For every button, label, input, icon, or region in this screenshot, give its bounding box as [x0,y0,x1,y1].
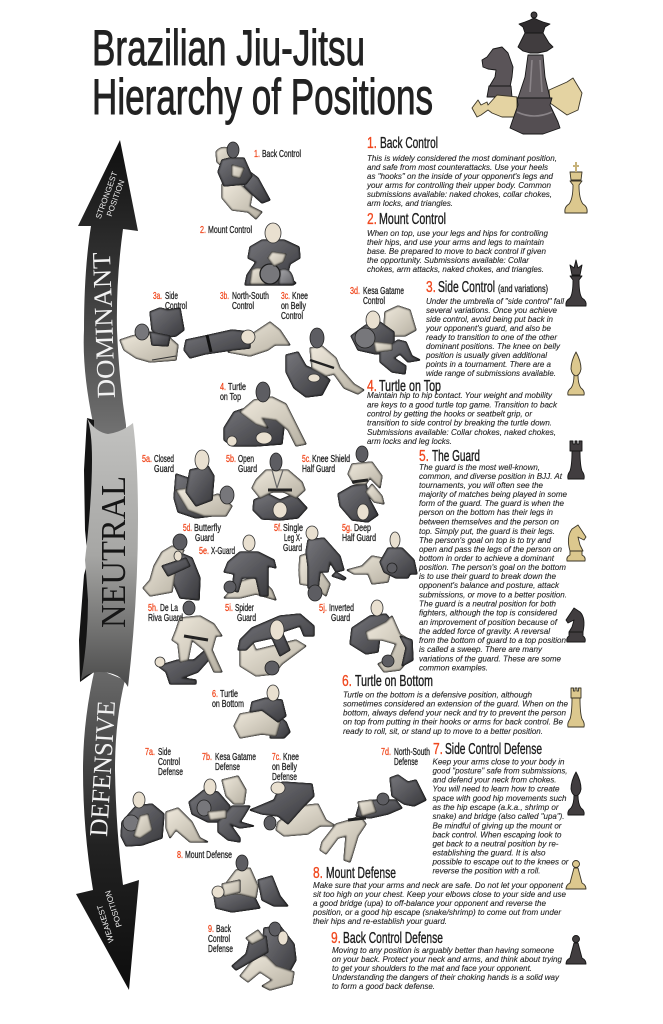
section 1: back control: arm locks, and triangles. [367,198,453,208]
section 7: side control defense: good "posture" safe from submissions, [432,766,568,776]
section 9: back control defense: to get your shoulders to the mat and face your opponent. [332,963,532,973]
section 4: turtle on top: Turtle on Top [379,378,441,395]
section 3: side control and variations: Side Control [438,279,495,296]
figure labels: Kesa Gatame [215,751,256,763]
figure labels: Closed [154,453,174,465]
section 1: back control: submissions available: naked chokes, collar chokes, [367,189,552,199]
figure labels: Open [238,453,254,465]
figure: 9 back control defense [232,922,296,990]
section 5: the guard: an improvement of position because of [419,617,558,627]
icon: white rook [568,688,584,727]
icon: white king [565,162,587,213]
figure: 3c knee on belly control [286,328,364,397]
section 3: side control and variations: position is usually given additional [425,350,548,360]
section 4: turtle on top: 4. [367,378,377,395]
section 7: side control defense: get back to a neutral position by re- [432,838,559,848]
section 8: mount defense: sit too high on your chest. Keep your elbows close to your side and use [313,889,566,899]
figure labels: Leg X- [284,532,302,544]
figure labels: Control [232,300,254,312]
figure labels: North-South [394,746,430,758]
section 5: the guard: variations of the guard. These are some [419,654,561,664]
title [92,20,433,125]
figure labels: on Belly [272,761,297,773]
figure labels: Side [158,746,171,758]
section 6: turtle on bottom: on top from putting in their hooks or arms for back control. Be [343,716,563,726]
section 8: mount defense: a good bridge (upa) to off-balance your opponent and reverse the [313,898,546,908]
figure labels: 9. [208,923,214,935]
icon: chess pieces, black king over fallen white king with black knight [472,12,582,134]
figure labels: 5a. [142,453,152,465]
section 8: mount defense [312,865,566,926]
figure: 5a closed guard [174,450,234,518]
icon: black queen [566,260,586,306]
figure: 5j inverted guard [350,600,413,672]
arrow: dominant to defensive scale [76,140,139,990]
icon: black bishop [568,772,584,815]
figure labels: Guard [195,532,214,544]
section 4: turtle on top [367,378,558,446]
figure labels: 7d. [381,746,391,758]
section 8: mount defense: 8. [313,865,323,882]
figure: 5e x-guard [224,535,276,600]
section 2: mount control: their hips, and use your arms and legs to maintain [367,237,544,247]
figure: 7b kesa gatame defense [189,776,254,842]
figure labels: 5c. [302,453,311,465]
figure labels: 8. [177,849,183,861]
title: Hierarchy of Positions [92,69,433,125]
figure labels: Control [165,300,187,312]
figure: 3d kesa gatame control [351,306,420,374]
figure: 5b open guard [252,453,307,520]
figure labels: Butterfly [194,522,222,534]
figure labels: Mount Defense [185,849,232,861]
figure labels: 1. [254,148,260,160]
figure labels: Defense [394,756,418,768]
figure labels: 6. [212,688,218,700]
figure labels: Inverted [329,602,354,614]
icon: white knight [567,525,586,561]
section 6: turtle on bottom: Turtle on the bottom is a defensive position, although [343,690,532,700]
section 7: side control defense: You will need to learn how to create [432,784,560,794]
section 5: the guard: 5. [419,448,429,465]
figure labels: Knee Shield [312,453,350,465]
figure labels: 5h. [148,602,158,614]
section 5: the guard: from the bottom of guard to a top position [419,635,566,645]
arrow label: weakest position: WEAKEST [95,904,116,944]
figure labels: Defense [272,771,297,783]
section 3: side control and variations: your opponent's guard, and also be [425,323,551,333]
figure: 5g deep half guard [347,532,417,584]
figure labels: Guard [237,612,256,624]
section 9: back control defense [331,930,562,991]
section 5: the guard: open and pass the legs of the person on [419,544,562,554]
figure labels [142,148,430,955]
section 8: mount defense: Mount Defense [326,865,396,882]
figure: 3b north-south control [184,322,290,358]
section 1: back control: as "hooks" on the inside of your opponent's legs and [367,171,554,181]
figure labels: 3a. [153,290,162,302]
figure labels: on Belly [281,300,306,312]
section 5: the guard: opponent's balance and posture, attack [419,580,560,590]
arrow label: strongest position: STRONGEST [94,170,119,220]
figure labels: Back Control [262,148,301,160]
figure labels: Guard [331,612,350,624]
figure labels: 7a. [145,746,155,758]
section 5: the guard: is called a sweep. There are many [419,644,543,654]
figure: 3a side control [120,308,184,362]
section 4: turtle on top: Maintain hip to hip contact. Your weight and mobility [367,390,553,400]
section 3: side control and variations: dominant positions. The knee on belly [426,341,561,351]
section 3: side control and variations: several variations. Once you achieve [426,305,557,315]
section 7: side control defense: snake) and bridge (also called "upa"). [432,811,564,821]
figure labels: 5j. [319,602,327,614]
section 9: back control defense: on your back. Protect your neck and arms, and think about trying [332,954,562,964]
section 9: back control defense: 9. [331,930,341,947]
figure: 5d butterfly guard [143,534,200,600]
figure labels: 5i. [225,602,233,614]
figure labels: Knee [283,751,299,763]
section 1: back control: and safe from most counterattacks. Use your heels [367,162,549,172]
section 8: mount defense: Make sure that your arms and neck are safe. Do not let your opponent [313,880,564,890]
figure labels: Defense [208,943,233,955]
section 8: mount defense: their hips and re-establish your guard. [313,916,447,926]
figure: 7c knee on belly defense [250,782,336,836]
figure labels: Riva Guard [148,612,183,624]
figure: 5c knee shield half guard [338,446,384,522]
figure labels: Back [216,923,231,935]
section 7: side control defense [432,741,570,876]
section 5: the guard: bottom in order to achieve a dominant [419,553,555,563]
section 2: mount control: When on top, use your legs and hips for controlling [367,228,548,238]
figure labels: Control [208,933,230,945]
section 9: back control defense: Moving to any position is arguably better than having someone [332,945,554,955]
section 4: turtle on top: Submissions available: Collar chokes, naked chokes, [367,427,556,437]
figure labels: Half Guard [342,532,376,544]
section 6: turtle on bottom [342,673,568,736]
section 1: back control [366,135,557,208]
figure labels: Kesa Gatame [363,285,404,297]
section 2: mount control: chokes, arm attacks, naked chokes, and triangles. [367,264,544,274]
section 5: the guard: position. The person's goal on the bottom [418,562,566,572]
section 1: back control: This is widely considered the most dominant position, [367,153,557,163]
section 5: the guard: majority of matches being played in some [419,489,567,499]
section 3: side control and variations: ready to transition to one of the other [426,332,558,342]
figure labels: Defense [215,761,240,773]
section 7: side control defense: Side Control Defense [445,741,542,758]
figure labels: Control [363,295,385,307]
section 2: mount control: base. Be prepared to move to back control if given [367,246,546,256]
section 7: side control defense: space with good hip movements such [432,793,567,803]
arrow label: weakest position [95,889,124,944]
section 6: turtle on bottom: 6. [342,673,352,690]
figure labels: 5d. [183,522,192,534]
figure labels: 7b. [202,751,212,763]
figure: 5h de la riva guard [155,601,222,684]
section 1: back control: your arms for controlling their upper body. Common [366,180,551,190]
section 5: the guard: is to use their guard to break down the [419,571,556,581]
section 7: side control defense: and defend your neck from chokes. [432,774,556,784]
figure: 8 mount defense [212,855,288,912]
section 3: side control and variations: 3. [426,279,436,296]
figure labels: on Bottom [212,698,244,710]
figure labels: Control [158,756,180,768]
figure labels: Spider [235,602,254,614]
section 3: side control and variations: side control, avoid being put back in [426,314,553,324]
figure labels: on Top [220,391,241,403]
section 4: turtle on top: control by getting the hooks or seatbelt grip, or [367,408,533,418]
section 1: back control: Back Control [380,135,438,152]
section 7: side control defense: back control. When escaping look to [432,830,562,840]
arrow label: defensive: DEFENSIVE [84,700,121,837]
section 2: mount control: the opportunity. Submissions available: Collar [367,255,530,265]
arrow label: strongest position: POSITION [105,178,126,218]
section 5: the guard: tournaments, you will often see the [419,480,543,490]
section 7: side control defense: 7. [433,741,443,758]
section 5: the guard: The person's goal on top is to try and [419,535,552,545]
section 5: the guard: between themselves and the person on [419,516,559,526]
section 9: back control defense: to form a good back defense. [332,981,435,991]
figure labels: Turtle [220,688,238,700]
figure labels: 3c. [281,290,290,302]
section 3: side control and variations: points in a tournament. There are a [425,359,551,369]
section 5: the guard: the added force of gravity. A reversal [419,626,551,636]
figure labels: 3b. [220,290,229,302]
section 4: turtle on top: arm locks and leg locks. [367,436,452,446]
figure labels: 7c. [272,751,281,763]
section 9: back control defense: Understanding the dangers of their choking hands is a solid way [332,972,560,982]
figure labels: 2. [200,224,206,236]
figure labels: 4. [220,381,226,393]
section 5: the guard: submissions, or move to a better position. [419,590,567,600]
section 5: the guard: form of the guard. The guard is when the [419,498,564,508]
section 5: the guard: person on the bottom has their legs in [418,507,553,517]
section 5: the guard: common, and diverse position in BJJ. At [419,471,563,481]
section 5: the guard: The Guard [432,448,480,465]
title: Brazilian Jiu-Jitsu [92,20,365,76]
icon: white bishop [568,352,584,395]
section 9: back control defense: Back Control Defense [343,930,443,947]
figure labels: Side [165,290,178,302]
figure labels: Guard [154,463,174,475]
section 1: back control: 1. [367,135,377,152]
figure labels: Mount Control [208,224,252,236]
arrow label: dominant: DOMINANT [87,252,121,399]
figure labels: 5e. [199,545,209,557]
section 6: turtle on bottom: Turtle on Bottom [355,673,433,690]
icon: black knight [566,608,585,642]
section 2: mount control [367,211,548,274]
section 4: turtle on top: are keys to a good turtle top game. Transition to back [367,400,558,410]
figure labels: Control [281,310,303,322]
section 7: side control defense: as the hip escape (a.k.a., shrimp or [432,802,560,812]
section 6: turtle on bottom: sometimes considered an extension of the guard. When on the [343,698,568,708]
section 7: side control defense: Keep your arms close to your body in [432,756,565,766]
section 3: side control and variations: wide range of submissions available. [426,368,556,378]
section 7: side control defense: establishing the guard. It is also [432,848,546,858]
figure labels: Guard [283,542,302,554]
figure labels: Knee [292,290,308,302]
figure: 7d north-south defense [320,775,426,862]
figure labels: North-South [232,290,269,302]
arrow label: weakest position: POSITION [103,889,124,928]
section 5: the guard: top. Simply put, the guard is their legs. [419,526,555,536]
section 7: side control defense: possible to escape out to the knees or [432,856,570,866]
figure labels: Guard [238,463,257,475]
figure: 6 turtle on bottom [234,685,290,738]
figure labels: Single [283,522,303,534]
icon: black pawn [566,936,586,964]
figure: 7a side control defense [121,792,208,846]
section 4: turtle on top: transition to side control by breaking the turtle down. [367,418,552,428]
figure labels: 5f. [274,522,282,534]
figure labels: 5g. [342,522,352,534]
section 2: mount control: Mount Control [379,211,446,228]
section 3: side control and variations: Under the umbrella of "side control" fall [426,296,565,306]
figure labels: 5b. [226,453,236,465]
figure: 5i spider guard [238,614,314,676]
section 3: side control and variations: (and variations) [498,283,548,295]
figure: 4 turtle on top [224,382,306,446]
arrow label: neutral: NEUTRAL [94,476,133,628]
figure labels: Half Guard [302,463,335,475]
section 6: turtle on bottom: ready to roll, sit, or stand up to move to a better position. [343,726,543,736]
figure labels: De La [160,602,178,614]
figure labels: Defense [158,766,183,778]
section 5: the guard: The guard is the most well-known, [419,462,540,472]
icon: black rook [568,441,584,479]
figure: 2 mount control [245,223,300,285]
section 5: the guard: The guard is a neutral position for both [419,598,556,608]
section 8: mount defense: position, or a good hip escape (snake/shrimp) to come out from under [312,907,562,917]
section 2: mount control: 2. [367,211,377,228]
icon: white pawn [566,860,586,889]
figure labels: 3d. [350,285,360,297]
figure labels: X-Guard [211,545,235,557]
section 3: side control and variations [425,279,565,378]
figure: 5f single leg x-guard [299,526,346,601]
figure labels: Turtle [228,381,246,393]
section 7: side control defense: reverse the position with a roll. [432,866,540,876]
section 5: the guard [418,448,567,672]
figure: 1 back control [216,142,270,219]
section 5: the guard: fighters, although the top is considered [419,608,558,618]
figure labels: Deep [354,522,371,534]
section 7: side control defense: Be mindful of giving up the mount or [432,820,563,830]
section 5: the guard: common examples. [419,662,488,672]
section 6: turtle on bottom: bottom, always defend your neck and try to prevent the person [343,708,566,718]
